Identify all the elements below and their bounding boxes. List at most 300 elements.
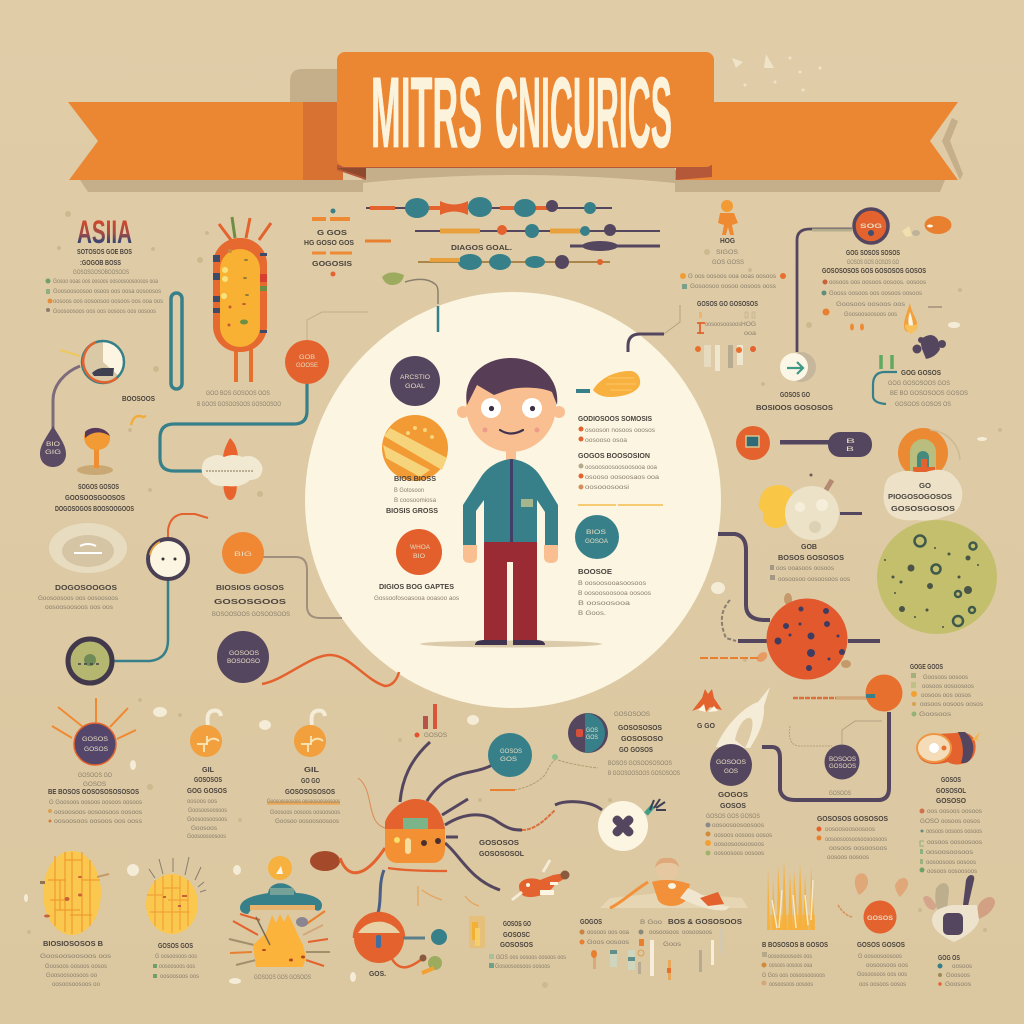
- panel: connector network right: GOSOOS: [716, 759, 747, 766]
- circle: purple with squiggle: BOSOOSO: [227, 658, 260, 665]
- text block: orange node legend: Goosoos: [919, 711, 952, 718]
- neck: [506, 448, 516, 462]
- text block: purple node notes: oosoosoosoosoos: [714, 841, 765, 848]
- text block: egg notes: GOSOSOL: [936, 786, 966, 795]
- panel: connector network right: BOSOOS: [829, 756, 857, 763]
- text block: egg notes: oosoos oosoosoos: [927, 839, 983, 846]
- text block: fork notes: GOG GOSOSOOS GOS: [888, 380, 951, 387]
- circle: teal label: [488, 733, 532, 777]
- icon: ringed face with connector: [112, 514, 208, 661]
- ground shadow: [420, 640, 602, 648]
- icon: orange circle one: [190, 711, 222, 757]
- text block: petal notes: Gosoosoos oos oos: [857, 971, 908, 978]
- mini bar chart: GOSOS: [424, 732, 448, 739]
- ribbon fold: [303, 102, 343, 180]
- trousers: [484, 541, 537, 641]
- panel: top right figure: Gosoosoo oosoo oosoos ooss: [690, 283, 777, 290]
- circle: orange label: [396, 529, 442, 575]
- circle: teal label: GOSOS: [500, 748, 523, 755]
- text block: robot caption: [479, 838, 524, 858]
- title banner: [68, 52, 963, 192]
- text block: corn large notes: [40, 939, 112, 988]
- text block: ball notes: B Gotosoon: [394, 487, 424, 494]
- text block: top centre left: GOGOSIS: [312, 259, 352, 268]
- text block: bars notes: [762, 940, 828, 988]
- strand four: [418, 254, 610, 270]
- icon: purple drop: [40, 426, 66, 467]
- icon: red badge with pill: B: [846, 446, 854, 453]
- text block: split notes: GOSOSOSOS: [618, 723, 662, 732]
- thin dashed path: [490, 754, 598, 791]
- text block: right notes: [578, 414, 659, 491]
- icon: purple blob: [912, 335, 946, 359]
- icon: orange ellipse with gem: [902, 216, 952, 237]
- text block: orange circle one notes: Goosoosoosoos: [187, 833, 227, 840]
- icon: corn large: [40, 851, 109, 935]
- banner panel: [337, 52, 714, 167]
- decorative speckles: [27, 211, 1002, 988]
- icon: white oval: [49, 523, 127, 573]
- text block: orange circle two notes: GOSOSOSOSOS: [285, 787, 335, 796]
- icon: hand badge: [923, 875, 995, 942]
- icon: white X circle: [598, 799, 666, 851]
- body: [385, 829, 445, 863]
- circle: purple label: ARCSTIO: [400, 374, 430, 381]
- panel: bottom figure text: B Goo: [640, 919, 662, 926]
- circle: purple with squiggle: [217, 631, 399, 686]
- text block: right notes: GOGOS BOOSOSION: [578, 451, 650, 460]
- icon: brown ellipse: [310, 851, 340, 871]
- icon: cloud with petals: [202, 438, 262, 500]
- circle: orange node with connector: GOB: [299, 354, 315, 361]
- panel: bottom figure text: Goos oosoos: [587, 939, 630, 946]
- text block: fork notes: [888, 368, 969, 408]
- icon: red badge with pill: [736, 426, 872, 460]
- icon: orange circle with petals: GOSOS: [867, 915, 894, 922]
- panel: bottom centre robot: [340, 742, 602, 913]
- icon: jar: [469, 916, 485, 948]
- text block: split notes: [608, 711, 680, 777]
- text block: orange node legend: [910, 662, 984, 718]
- panel: top left text: SOTOSOS GOE BOS: [77, 247, 132, 256]
- text block: top right: Goosoosoosoos oos: [844, 311, 898, 318]
- strand two: [415, 224, 660, 238]
- text block: sun notes: oosoosoos oosoos oos ooss: [54, 818, 143, 825]
- text block: connector notes: oosoos oosoos: [827, 854, 870, 861]
- icon: ringed orange badge with connector: [797, 209, 888, 352]
- panel: connector network right: GOS: [724, 768, 739, 775]
- text block: teal circle notes: B oosoosoosooa oosoos: [578, 590, 652, 597]
- panel: connector network right: GOSOOS: [829, 790, 851, 797]
- circle: orange node with connector: GOOSE: [296, 362, 319, 369]
- panel: top left text: [46, 214, 164, 315]
- text block: fork notes: GOSOOS GOSOS OS: [895, 401, 952, 408]
- text block: petal notes: GOSOS GOSOS: [857, 940, 905, 949]
- icon: yellow bars: [767, 860, 815, 930]
- text block: orange node legend: oosoos oos oosos: [921, 692, 972, 699]
- text block: ball notes: B coosoomiosa: [394, 497, 436, 504]
- text block: bars notes: oosoos oosoos ooa: [769, 962, 812, 969]
- panel: sun badge: GOSOS: [82, 736, 109, 743]
- text block: oval caption: Goosoosoos oos oosoosoos: [38, 595, 119, 602]
- purple node: [710, 744, 752, 786]
- text block: orange circle one notes: Goosoos: [191, 825, 218, 832]
- icon: ringed orange badge with connector: SOG: [860, 223, 882, 230]
- icon: orange leaf: [576, 371, 640, 397]
- circle: split label: [568, 713, 608, 753]
- text block: top right: oosoos oos oosoos oosoos. oosoos: [829, 279, 927, 286]
- panel: bottom figure text: oosoosoos: [682, 929, 713, 936]
- circle: orange with connector: BIG: [234, 551, 252, 558]
- icon: capsule bug: [213, 217, 271, 382]
- text block: orange circle two notes: GO GO: [301, 776, 320, 785]
- shoes: [475, 640, 545, 645]
- icon: orange circle with petals: [838, 873, 908, 934]
- text block: mushroom caption: DOGOSOGOS BOOSOOGOOS: [55, 504, 134, 513]
- text block: split notes: B GOOSOOSOOS GOSOSOOS: [608, 770, 680, 777]
- circle: purple label: [390, 356, 440, 406]
- ears: [457, 406, 565, 418]
- orange dash: [365, 240, 391, 242]
- thin connector: [664, 305, 680, 334]
- jacket: [463, 459, 558, 545]
- text block: corn small notes: [153, 941, 200, 980]
- mini chart: HOG: [741, 321, 756, 328]
- text block: orange circle one notes: GOG GOSOS: [187, 786, 227, 795]
- icon: white arrow circle: [780, 352, 816, 382]
- text block: jar notes: GOSOS GO: [503, 919, 531, 928]
- text block: jar notes: GOS oos oosoos oosoos oos: [496, 954, 567, 961]
- text block: connector notes: oosoosoosoosoos: [825, 826, 876, 833]
- mini bar chart: [414, 704, 448, 739]
- text block: jar notes: GOSOSC: [503, 930, 530, 939]
- small purple node: [842, 721, 882, 744]
- text block: arrow caption: BOSIOOS GOSOSOS: [756, 403, 833, 412]
- circle: purple label: GOAL: [405, 383, 425, 390]
- text block: sombrero caption: GOSOOS GOS GOSOOS: [254, 974, 311, 981]
- icon: fox head: [692, 689, 722, 730]
- icon: leaf connector: [382, 272, 438, 332]
- text block: hand legend: oosoos: [952, 963, 973, 970]
- icon: orange striped ball: [382, 415, 448, 481]
- hands: [463, 545, 558, 563]
- text block: egg notes: oosoos oosoosoos: [927, 868, 978, 875]
- text block: orange circle one notes: Goosoosoosoos: [187, 816, 228, 823]
- text block: orange circle one notes: GOSOSOS: [194, 775, 222, 784]
- text block: bug caption: [197, 390, 281, 408]
- icon: orange bird: [512, 860, 570, 900]
- icon: flame: [904, 303, 942, 334]
- text block: right notes: oosooso osoa: [585, 437, 627, 444]
- text block: split notes: GO GOSOS: [619, 745, 653, 754]
- text block: right notes: oosoosoosoosoosooa ooa: [585, 464, 657, 471]
- mini chart: [697, 312, 756, 337]
- label: [122, 394, 155, 425]
- thin connector: [307, 312, 368, 340]
- text block: connector notes: GOSOSOS GOSOSOS: [817, 814, 888, 823]
- text block: arrow caption: [756, 390, 833, 412]
- title text: MITRS: [371, 57, 482, 169]
- wires: [378, 742, 602, 913]
- text block: right notes: oosooosoosi: [585, 484, 629, 491]
- text block: egg notes: [920, 775, 983, 875]
- ribbon shadows: [80, 69, 963, 192]
- small candles: [695, 345, 756, 371]
- text block: centre left: [212, 583, 291, 618]
- strand caption: DIAGOS GOAL.: [451, 243, 512, 252]
- text block: petal notes: [857, 940, 909, 988]
- banner underside: [337, 165, 712, 180]
- text block: fork notes: GOG GOSOS: [901, 368, 941, 377]
- text block: egg notes: GOSO oosoos oosos: [920, 818, 981, 825]
- text block: orange circle one notes: Goosoosoosoos: [188, 807, 228, 814]
- text block: bars notes: G Gos oos oosoosoosoos: [762, 972, 826, 979]
- text block: bug caption: GOO BOS GOSOOS OOS: [206, 390, 271, 397]
- dome: [385, 799, 445, 829]
- text block: purple node notes: [705, 790, 773, 857]
- text block: orange circle two notes: Goosoos oosoos oosoosoos: [270, 809, 341, 816]
- text block: corn large notes: Goosoos oosoos oosos: [45, 963, 108, 970]
- text block: arrow caption: GOSOS GO: [780, 390, 810, 399]
- text block: orange circle two notes: Goosoo oosoosoosoos: [275, 818, 340, 825]
- circle: orange node with connector: [160, 340, 329, 471]
- circle: orange label: WHOA: [410, 544, 431, 551]
- pocket: [521, 499, 533, 507]
- text block: hand legend: Goosoos: [946, 972, 971, 979]
- controls: [394, 837, 441, 854]
- panel: bottom figure text: oosoosoos: [649, 929, 680, 936]
- panel: sun badge: GOSOS: [84, 746, 109, 753]
- text block: egg notes: GOSOSO: [936, 796, 966, 805]
- text block: ball notes: BIOS BIOSS: [394, 474, 436, 483]
- icon: reclining figure: [600, 858, 748, 910]
- icon: red pot: [354, 913, 447, 978]
- icon: red planet with connectors: [700, 534, 880, 680]
- panel: bottom figure text: oosoos oos ooa: [587, 929, 629, 936]
- text block: hand legend: GOG OS: [938, 953, 960, 962]
- text block: oval caption: DOGOSOOGOS: [55, 583, 117, 592]
- text block: top right: GOG SOSOS SOSOS: [846, 248, 900, 257]
- text block: purple node notes: oosoosoos oosoos: [714, 850, 765, 857]
- icon: red badge with pill: B: [846, 438, 855, 445]
- circle: split label: GOS: [586, 734, 599, 741]
- text block: top right: Gooss oosoos oos oosoos oosoos: [829, 290, 923, 297]
- text block: corn small notes: G oosoosoos oos: [155, 953, 198, 960]
- text block: top centre left: HG GOSO GOS: [304, 238, 354, 247]
- text block: purple node notes: oosoosoosoosoos: [712, 822, 765, 829]
- circle: teal label: GOS: [500, 756, 518, 763]
- circle: teal label: GOSOA: [585, 538, 609, 545]
- panel: top left text: :GOGOB BOSS: [80, 258, 121, 267]
- panel: bottom figure text: GOGOS: [580, 917, 602, 926]
- panel: top left text: GOSOSGOSOBOOSOOS: [73, 269, 129, 276]
- panel: top right figure: HOG: [720, 236, 735, 245]
- eyes: [481, 398, 542, 418]
- text block: sun notes: G Goosoos oosoos oosoos oosoos: [49, 799, 143, 806]
- text block: ball notes: [386, 474, 438, 515]
- text block: fork notes: BE BO GOSOSOOS GOSOS: [890, 390, 969, 397]
- text block: egg notes: oosoos oosoos oosoos: [926, 828, 983, 835]
- text block: hand legend: [938, 953, 973, 988]
- text block: purple node notes: oosoos oosoos oosos: [714, 832, 773, 839]
- text block: top right: [822, 248, 927, 330]
- text block: petal notes: G oosoosoosoos: [858, 953, 903, 960]
- horn: [716, 687, 770, 748]
- icon: sombrero sun: [229, 856, 330, 967]
- text block: egg notes: oos oosoos oosoos: [927, 808, 983, 815]
- panel: sun badge: [52, 698, 136, 765]
- strand three: [570, 241, 660, 251]
- text block: petal notes: oos oosoos oosos: [859, 981, 907, 988]
- icon: fox head: G GO: [697, 721, 715, 730]
- text block: orange circle one notes: oosoos oos: [187, 798, 218, 805]
- icon: green fork: [873, 355, 897, 404]
- text block: corn small notes: oosoosoos oos: [160, 973, 200, 980]
- panel: top right figure: GOSOS GO GOSOSOS: [697, 299, 758, 308]
- icon: olive ring: [68, 639, 112, 683]
- circle: orange with connector: [222, 532, 342, 618]
- text block: bug caption: B GOOS GOSOOSOOS GOSOOSOO: [197, 401, 281, 408]
- text block: beige ball caption: BOSOS GOSOSOS: [778, 553, 844, 562]
- text block: top right: Goosoos oosoos oos: [836, 301, 906, 308]
- panel: bottom figure text: BOS & GOSOSOOS: [668, 917, 742, 926]
- text block: bars notes: oosoosoosoos oos: [768, 953, 813, 960]
- text block: beige ball caption: [770, 542, 851, 583]
- icon: purple drop: BIO: [46, 441, 60, 448]
- cloud label: PIOGOSOGOSOS: [888, 492, 952, 501]
- text block: corn large notes: oosoosoosoos oo: [52, 981, 100, 988]
- text block: right notes: GODIOSOOS SOMOSIS: [578, 414, 652, 423]
- text block: corn large notes: BIOSIOSOSOS B: [43, 939, 104, 948]
- icon: corn small: [146, 857, 206, 934]
- central circle: [305, 292, 721, 708]
- text block: mushroom caption: SOGOS GOSOS: [78, 482, 119, 491]
- panel: bottom figure text: Goos: [663, 941, 682, 948]
- text block: beige ball caption: oos ooasoos oosoos: [776, 565, 835, 572]
- text block: orange node legend: oosoos oosoos oosos: [920, 701, 984, 708]
- text block: mushroom caption: [55, 482, 134, 513]
- panel: top left text: Goosoosoosoo osoos oos oosa oosoosos: [53, 288, 162, 295]
- icon: purple drop: GIG: [45, 449, 61, 456]
- strand one: [366, 197, 612, 218]
- text block: jar notes: Gosoosoosoos oosoos: [495, 963, 551, 970]
- text block: orange circle two notes: GIL: [304, 765, 320, 774]
- cheeks: [482, 428, 540, 432]
- text block: orange circle two notes: [267, 765, 341, 825]
- text block: right notes: osooso oosoosaos ooa: [585, 474, 659, 481]
- text block: purple node notes: GOSOS GOS GOSOS: [706, 813, 761, 820]
- connector: [628, 334, 664, 352]
- small vials: [591, 928, 723, 980]
- text block: orange circle notes: DIGIOS BOG GAPTES: [379, 582, 454, 591]
- text block: orange circle notes: Gossoofosoasooa ooasoo aos: [374, 595, 460, 602]
- panel: connector network right: [710, 674, 902, 800]
- text block: orange node legend: Goosoos oosoos: [923, 674, 969, 681]
- text block: corn large notes: Goosoosoosoos oos: [40, 953, 112, 960]
- top strands: [365, 197, 660, 270]
- orange node: [866, 674, 902, 712]
- left arc: [340, 848, 385, 873]
- circle: purple with squiggle: GOSOOS: [229, 650, 260, 657]
- panel: top left text: oosoos oos oosoosoo oosoos oos ooa oos: [53, 298, 164, 305]
- icon: yellow and beige ball: [759, 474, 862, 540]
- text block: connector notes: oosoos oosoosoos: [829, 845, 888, 852]
- text block: egg notes: oosoosoos oosoos: [926, 859, 977, 866]
- panel: bottom figure text: [580, 917, 742, 980]
- decorative sparkles: [732, 54, 822, 92]
- text block: teal circle notes: B oosoosooa: [578, 600, 631, 607]
- icon: magnifier: [53, 341, 124, 430]
- text block: bars notes: oosoosoos oosoos: [769, 981, 814, 988]
- side bands: [213, 253, 267, 333]
- panel: top right figure: SIGOS: [716, 249, 739, 256]
- icon: large green spotted circle: [877, 520, 997, 634]
- text block: orange circle one notes: [187, 765, 228, 840]
- text block: robot caption: GOSOSOS: [479, 838, 519, 847]
- text block: egg notes: oosoosoosoos: [926, 849, 974, 856]
- text block: orange circle one notes: GIL: [202, 765, 214, 774]
- text block: petal notes: oosoosoos oos: [866, 962, 909, 969]
- heading: colourful word: ASIIA: [77, 214, 132, 250]
- panel: connector network right: GOSOOS: [829, 763, 857, 770]
- text block: oval caption: oosoosoosoos oos oos: [45, 604, 114, 611]
- person figure: [420, 358, 602, 648]
- smile: [500, 430, 523, 434]
- divider: [578, 504, 663, 506]
- decorative lines: [418, 886, 479, 906]
- text block: teal circle notes: [578, 567, 652, 617]
- text block: ball notes: BIOSIS GROSS: [386, 506, 438, 515]
- icon: orange figure: [718, 200, 738, 235]
- text block: sun notes: oosoosoos oosoosoos oosoos: [54, 809, 143, 816]
- text block: teal circle notes: B Goos.: [578, 610, 606, 617]
- text block: jar notes: GOSOSOS: [500, 940, 533, 949]
- antennae: [219, 217, 271, 240]
- text block: corn large notes: Goosoosoosoos oo: [46, 972, 97, 979]
- panel: top right figure: [680, 200, 786, 371]
- cloud label: GOSOSGOSOS: [891, 504, 955, 513]
- icon: orange circle two: [294, 711, 326, 757]
- circle: split label: GOS: [586, 727, 599, 734]
- text block: hand legend: Goosoos: [945, 981, 972, 988]
- zip: [510, 459, 513, 542]
- text block: sun notes: GOSOOS GO: [78, 772, 112, 779]
- ribbon left tail: [68, 102, 304, 180]
- icon: mushroom: [77, 428, 113, 475]
- text block: orange node legend: GOGE GOOS: [910, 662, 943, 671]
- text block: sun notes: BE BOSOS GOSOSOSOSOSOS: [48, 787, 139, 796]
- text block: orange node legend: oosoos oosoosoos: [922, 683, 975, 690]
- text block: centre left: BIOSIOS GOSOS: [216, 583, 284, 592]
- text block: top right: GOSOSOSOS GOS GOSOSOS GOSOS: [822, 266, 926, 275]
- icon: teal tube: [171, 293, 182, 389]
- text block: connector notes: oosoosoosoosoosoosoos: [825, 836, 888, 843]
- circle: orange label: BIO: [413, 553, 425, 560]
- text block: centre left: GOSOSGOOS: [214, 597, 286, 606]
- panel: top left text: Goosoosoos oos oos oosoos oos oosoos: [53, 308, 157, 315]
- text block: top centre left: G GOS: [317, 228, 347, 237]
- circle: teal label: BIOS: [586, 529, 607, 536]
- hair: [466, 358, 557, 405]
- legs: [234, 348, 253, 382]
- text block: corn small notes: GOSOS GOS: [158, 941, 193, 950]
- text block: top right: GOSOS GOS GOSOS GO: [847, 259, 899, 266]
- mini chart: ooa: [744, 330, 756, 337]
- text block: beige ball caption: GOB: [801, 542, 818, 551]
- text block: connector notes: [816, 814, 888, 861]
- text block: bars notes: B BOSOSOS B GOSOS: [762, 940, 828, 949]
- label: BOOSOOS: [122, 394, 155, 403]
